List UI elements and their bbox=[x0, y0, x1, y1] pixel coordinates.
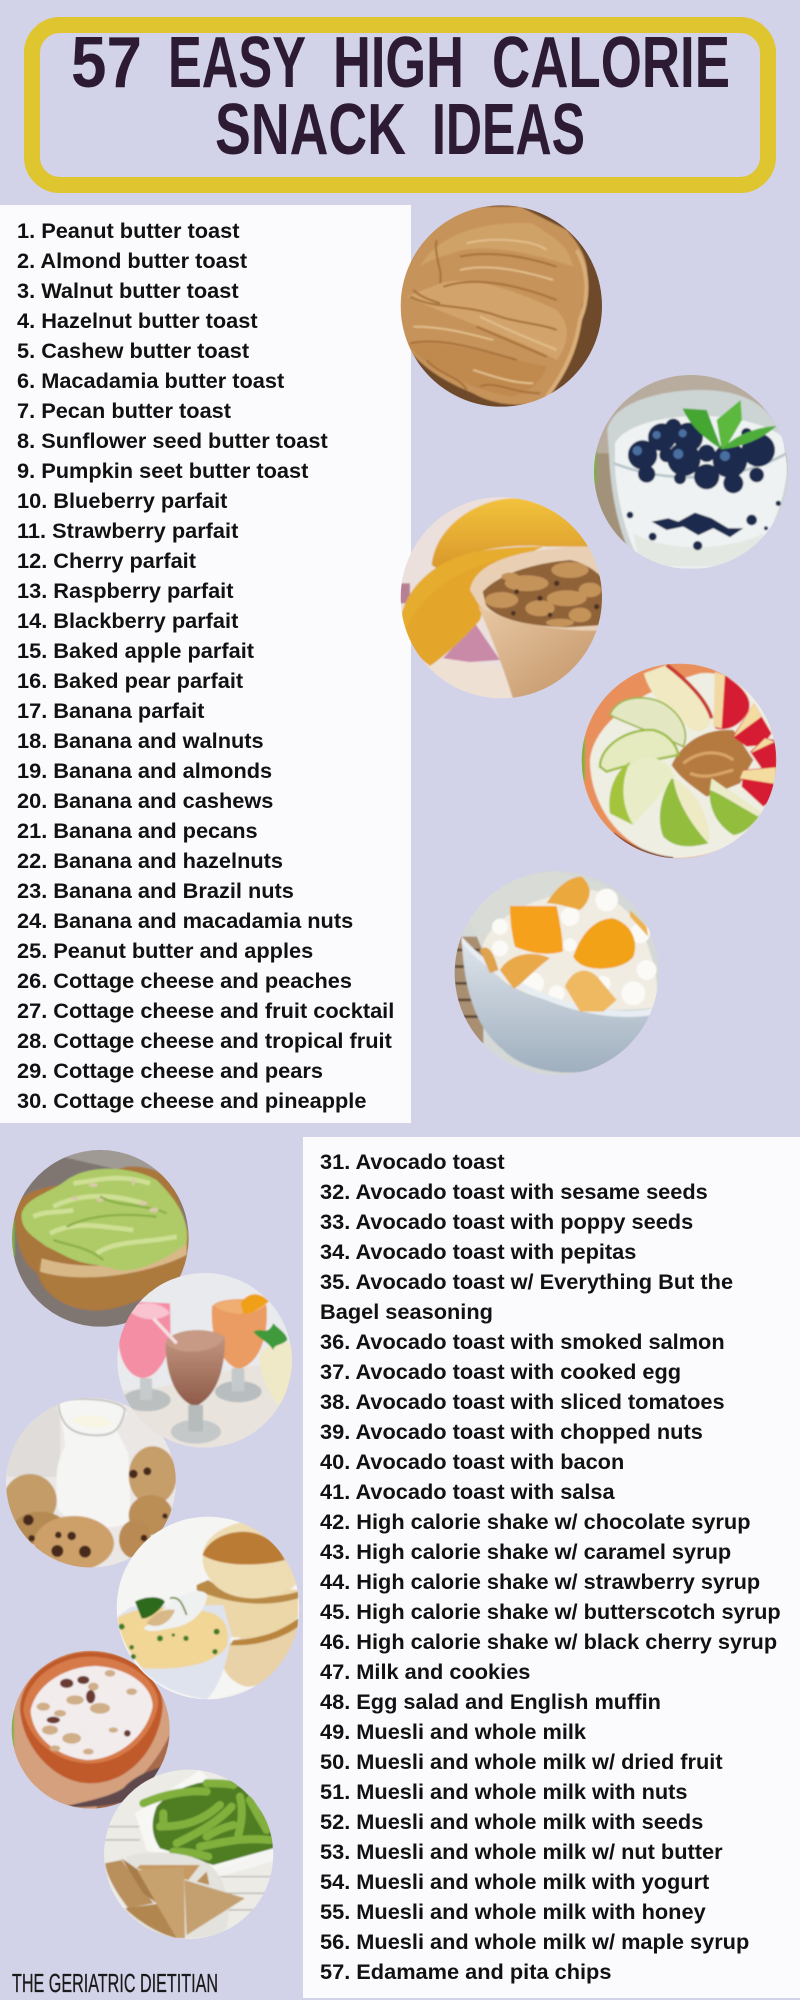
text block: snacks 31 to 57: 42. High calorie shake w/ chocolate syrup bbox=[320, 1510, 750, 1534]
text block: snacks 1 to 30: 15. Baked apple parfait bbox=[17, 639, 254, 663]
text block: snacks 1 to 30: 8. Sunflower seed butter toast bbox=[17, 429, 328, 453]
text block: snacks 1 to 30: 28. Cottage cheese and tropical fruit bbox=[17, 1029, 392, 1053]
text block: snacks 1 to 30: 7. Pecan butter toast bbox=[17, 399, 231, 423]
text block: snacks 1 to 30: 17. Banana parfait bbox=[17, 699, 204, 723]
icon: avocado toast bbox=[10, 1147, 193, 1330]
text block: snacks 1 to 30: 13. Raspberry parfait bbox=[17, 579, 233, 603]
text block: snacks 31 to 57: 34. Avocado toast with pepitas bbox=[320, 1240, 636, 1264]
text block: snacks 1 to 30: 6. Macadamia butter toast bbox=[17, 369, 284, 393]
text block: snacks 1 to 30: 30. Cottage cheese and pineapple bbox=[17, 1089, 366, 1113]
text block: snacks 1 to 30: 11. Strawberry parfait bbox=[17, 519, 238, 543]
text block: snacks 31 to 57: 52. Muesli and whole milk with seeds bbox=[320, 1810, 703, 1834]
icon: peanut butter toast bbox=[400, 200, 607, 413]
text block: snacks 1 to 30: 26. Cottage cheese and peaches bbox=[17, 969, 352, 993]
text block: snacks 1 to 30: 25. Peanut butter and apples bbox=[17, 939, 313, 963]
text block: snacks 1 to 30: 23. Banana and Brazil nuts bbox=[17, 879, 294, 903]
text block: snacks 1 to 30: 4. Hazelnut butter toast bbox=[17, 309, 258, 333]
text block: snacks 31 to 57: 44. High calorie shake w/ strawberry syrup bbox=[320, 1570, 760, 1594]
icon: high calorie shakes bbox=[115, 1272, 295, 1450]
title: EASY bbox=[168, 23, 306, 103]
icon: egg salad and english muffin bbox=[115, 1513, 302, 1703]
icon: peanut butter and apples bbox=[580, 663, 780, 860]
text block: snacks 31 to 57: 37. Avocado toast with cooked egg bbox=[320, 1360, 681, 1384]
title: HIGH bbox=[333, 23, 464, 103]
text block: snacks 31 to 57: 46. High calorie shake w/ black cherry syrup bbox=[320, 1630, 777, 1654]
text block: snacks 31 to 57: 35. Avocado toast w/ Everything But the bbox=[320, 1270, 733, 1294]
text block: snacks 31 to 57: 38. Avocado toast with sliced tomatoes bbox=[320, 1390, 725, 1414]
text block: snacks 1 to 30: 20. Banana and cashews bbox=[17, 789, 273, 813]
text block: snacks 1 to 30: 24. Banana and macadamia nuts bbox=[17, 909, 353, 933]
text block: snacks 1 to 30: 19. Banana and almonds bbox=[17, 759, 272, 783]
text block: snacks 1 to 30: 27. Cottage cheese and fruit cocktail bbox=[17, 999, 394, 1023]
icon: cottage cheese and peaches bbox=[453, 870, 663, 1077]
text block: snacks 1 to 30: 2. Almond butter toast bbox=[17, 249, 247, 273]
text block: snacks 1 to 30: 5. Cashew butter toast bbox=[17, 339, 249, 363]
text block: snacks 1 to 30: 9. Pumpkin seet butter toast bbox=[17, 459, 308, 483]
title: SNACK bbox=[215, 90, 406, 170]
title: IDEAS bbox=[432, 90, 585, 170]
text block: snacks 31 to 57: 56. Muesli and whole milk w/ maple syrup bbox=[320, 1930, 749, 1954]
text block: snacks 1 to 30: 18. Banana and walnuts bbox=[17, 729, 264, 753]
text block: snacks 31 to 57: 36. Avocado toast with smoked salmon bbox=[320, 1330, 725, 1354]
text block: snacks 1 to 30: 22. Banana and hazelnuts bbox=[17, 849, 283, 873]
text block: snacks 1 to 30: 12. Cherry parfait bbox=[17, 549, 196, 573]
text block: snacks 1 to 30: 29. Cottage cheese and pears bbox=[17, 1059, 323, 1083]
text block: snacks 1 to 30: 3. Walnut butter toast bbox=[17, 279, 239, 303]
title: 57 bbox=[71, 23, 142, 103]
text block: snacks 31 to 57: 47. Milk and cookies bbox=[320, 1660, 530, 1684]
text block: snacks 31 to 57 bbox=[320, 1150, 781, 1984]
text block: snacks 31 to 57: 39. Avocado toast with chopped nuts bbox=[320, 1420, 703, 1444]
text block: snacks 31 to 57: 53. Muesli and whole milk w/ nut butter bbox=[320, 1840, 723, 1864]
icon: banana and walnuts bbox=[400, 497, 607, 700]
text block: snacks 31 to 57: 40. Avocado toast with bacon bbox=[320, 1450, 624, 1474]
text block: snacks 1 to 30: 1. Peanut butter toast bbox=[17, 219, 239, 243]
text block: snacks 31 to 57: 50. Muesli and whole milk w/ dried fruit bbox=[320, 1750, 723, 1774]
panel: snack list 31 to 57 bbox=[303, 1137, 800, 1998]
icon: milk and cookies bbox=[3, 1397, 180, 1571]
text block: snacks 31 to 57: 57. Edamame and pita chips bbox=[320, 1960, 611, 1984]
icon: edamame and pita chips bbox=[102, 1768, 277, 1942]
text block: snacks 1 to 30: 14. Blackberry parfait bbox=[17, 609, 238, 633]
text block: snacks 31 to 57: 49. Muesli and whole milk bbox=[320, 1720, 586, 1744]
icon: blueberry parfait bbox=[590, 370, 793, 573]
text block: snacks 31 to 57: 54. Muesli and whole milk with yogurt bbox=[320, 1870, 709, 1894]
icon: muesli with milk bbox=[10, 1650, 173, 1810]
text block: snacks 31 to 57: 48. Egg salad and English muffin bbox=[320, 1690, 661, 1714]
panel: snack list 1 to 30 bbox=[0, 205, 411, 1123]
text block: snacks 31 to 57: 51. Muesli and whole milk with nuts bbox=[320, 1780, 688, 1804]
text block: snacks 31 to 57: 32. Avocado toast with sesame seeds bbox=[320, 1180, 708, 1204]
text block: snacks 31 to 57: 43. High calorie shake w/ caramel syrup bbox=[320, 1540, 731, 1564]
text block: snacks 31 to 57: 33. Avocado toast with poppy seeds bbox=[320, 1210, 693, 1234]
footer credit: THE GERIATRIC DIETITIAN bbox=[12, 1968, 218, 1998]
text block: snacks 31 to 57: 31. Avocado toast bbox=[320, 1150, 505, 1174]
text block: snacks 31 to 57: Bagel seasoning bbox=[320, 1300, 493, 1324]
text block: snacks 1 to 30 bbox=[17, 219, 394, 1113]
text block: snacks 31 to 57: 55. Muesli and whole milk with honey bbox=[320, 1900, 706, 1924]
title banner bbox=[24, 17, 776, 193]
text block: snacks 31 to 57: 45. High calorie shake w/ butterscotch syrup bbox=[320, 1600, 781, 1624]
text block: snacks 1 to 30: 16. Baked pear parfait bbox=[17, 669, 243, 693]
title bbox=[71, 23, 730, 170]
text block: snacks 31 to 57: 41. Avocado toast with salsa bbox=[320, 1480, 615, 1504]
text block: snacks 1 to 30: 21. Banana and pecans bbox=[17, 819, 258, 843]
text block: snacks 1 to 30: 10. Blueberry parfait bbox=[17, 489, 227, 513]
